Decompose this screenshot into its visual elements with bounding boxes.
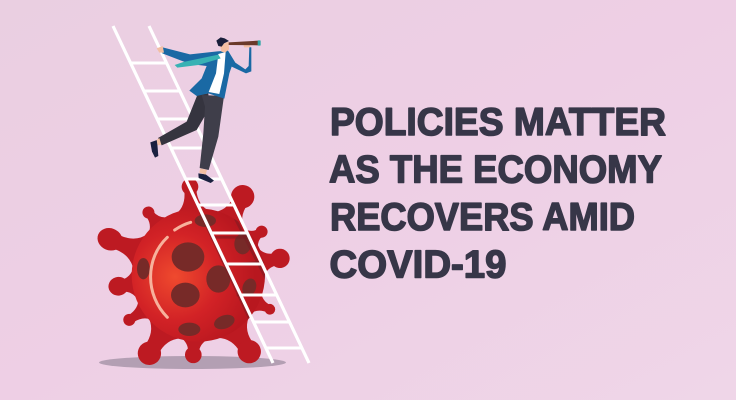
title line 1: POLICIES MATTER	[330, 101, 666, 144]
icon: coronavirus	[91, 177, 293, 373]
back leg	[158, 93, 209, 145]
hair	[216, 37, 229, 47]
title line 4: COVID-19	[330, 244, 506, 286]
hands and face	[157, 42, 251, 53]
businessman with telescope	[150, 37, 261, 183]
ankles	[157, 138, 207, 175]
jacket	[162, 47, 251, 99]
title	[329, 101, 666, 286]
shirt	[209, 52, 226, 94]
ladder	[113, 26, 309, 363]
front leg	[200, 95, 224, 170]
ground shadow	[99, 356, 286, 369]
illustration canvas	[98, 26, 666, 369]
title line 2: AS THE ECONOMY	[329, 148, 662, 192]
title line 3: RECOVERS AMID	[330, 196, 635, 239]
telescope	[229, 40, 261, 46]
shoes	[150, 140, 214, 183]
tie	[175, 55, 221, 68]
